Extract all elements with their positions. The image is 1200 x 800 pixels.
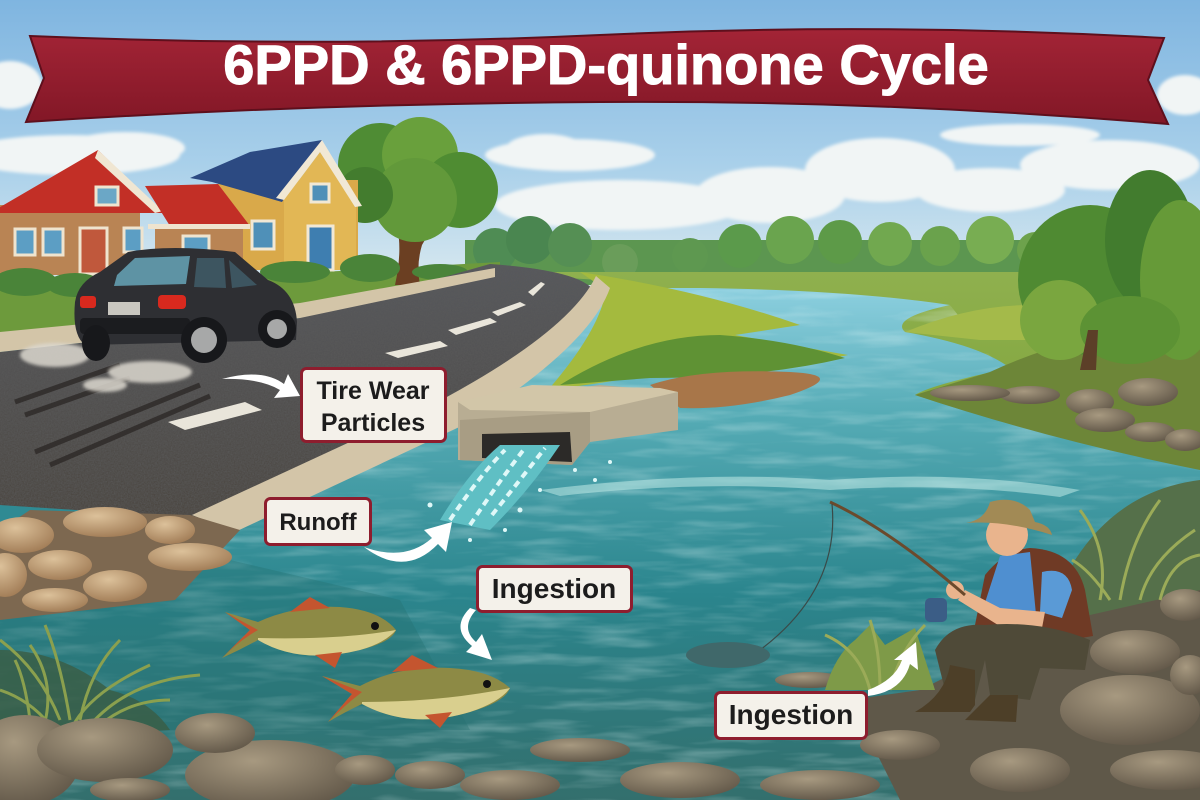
lawn left bbox=[0, 262, 500, 335]
car bbox=[74, 248, 297, 363]
fish shadow under hook bbox=[686, 642, 770, 668]
arrow: runoff to outflow bbox=[364, 522, 452, 562]
fisherman bbox=[760, 500, 1093, 722]
label: ingestion by fish bbox=[478, 566, 632, 612]
big tree bbox=[337, 117, 498, 285]
grass bank centre bbox=[548, 272, 1030, 408]
right grasses bbox=[825, 500, 1200, 690]
curb bbox=[0, 268, 610, 532]
tire tracks bbox=[15, 365, 210, 465]
label: ingestion by human: Ingestion bbox=[729, 699, 853, 730]
label: ingestion by human bbox=[716, 692, 866, 738]
clouds bbox=[0, 61, 1200, 230]
culvert outlet bbox=[458, 385, 678, 465]
outflow splash bbox=[428, 445, 612, 542]
road markings bbox=[168, 282, 545, 430]
title banner: 6PPD & 6PPD-quinone Cycle bbox=[223, 33, 989, 96]
right bank trees bbox=[915, 170, 1200, 470]
label: ingestion by fish: Ingestion bbox=[492, 573, 616, 604]
fisherman shore rocks bbox=[775, 589, 1200, 800]
right bank rocks bbox=[930, 378, 1200, 451]
arrow: ingestion to fisherman bbox=[868, 642, 918, 696]
label: tire wear particles: Particles bbox=[321, 409, 425, 437]
label: tire wear particles: Tire Wear bbox=[316, 377, 430, 405]
label: runoff bbox=[266, 498, 370, 544]
label: runoff: Runoff bbox=[279, 509, 358, 536]
sky background bbox=[0, 0, 1200, 300]
house: blue roof yellow bbox=[190, 140, 362, 270]
arrow: ingestion to fish bbox=[460, 608, 492, 660]
fish upper bbox=[222, 597, 396, 668]
label: tire wear particles bbox=[302, 368, 446, 442]
road bbox=[0, 260, 610, 525]
house: middle red roof bbox=[145, 184, 250, 275]
dust cloud bbox=[20, 343, 192, 392]
distant tree line bbox=[465, 216, 1065, 285]
hedges bbox=[0, 254, 468, 297]
meadow bbox=[470, 272, 1200, 470]
rocks left shore bbox=[0, 507, 240, 620]
fishing rod and line bbox=[830, 502, 965, 595]
fish lower bbox=[322, 655, 510, 728]
bottom rocks bbox=[0, 713, 880, 800]
right side reeds bank bbox=[1068, 480, 1200, 620]
house: left red roof bbox=[0, 150, 163, 275]
left grasses bbox=[0, 625, 200, 740]
arrow: to tire wear particles bbox=[222, 374, 300, 398]
title banner bbox=[26, 29, 1168, 124]
river water bbox=[0, 288, 1200, 800]
